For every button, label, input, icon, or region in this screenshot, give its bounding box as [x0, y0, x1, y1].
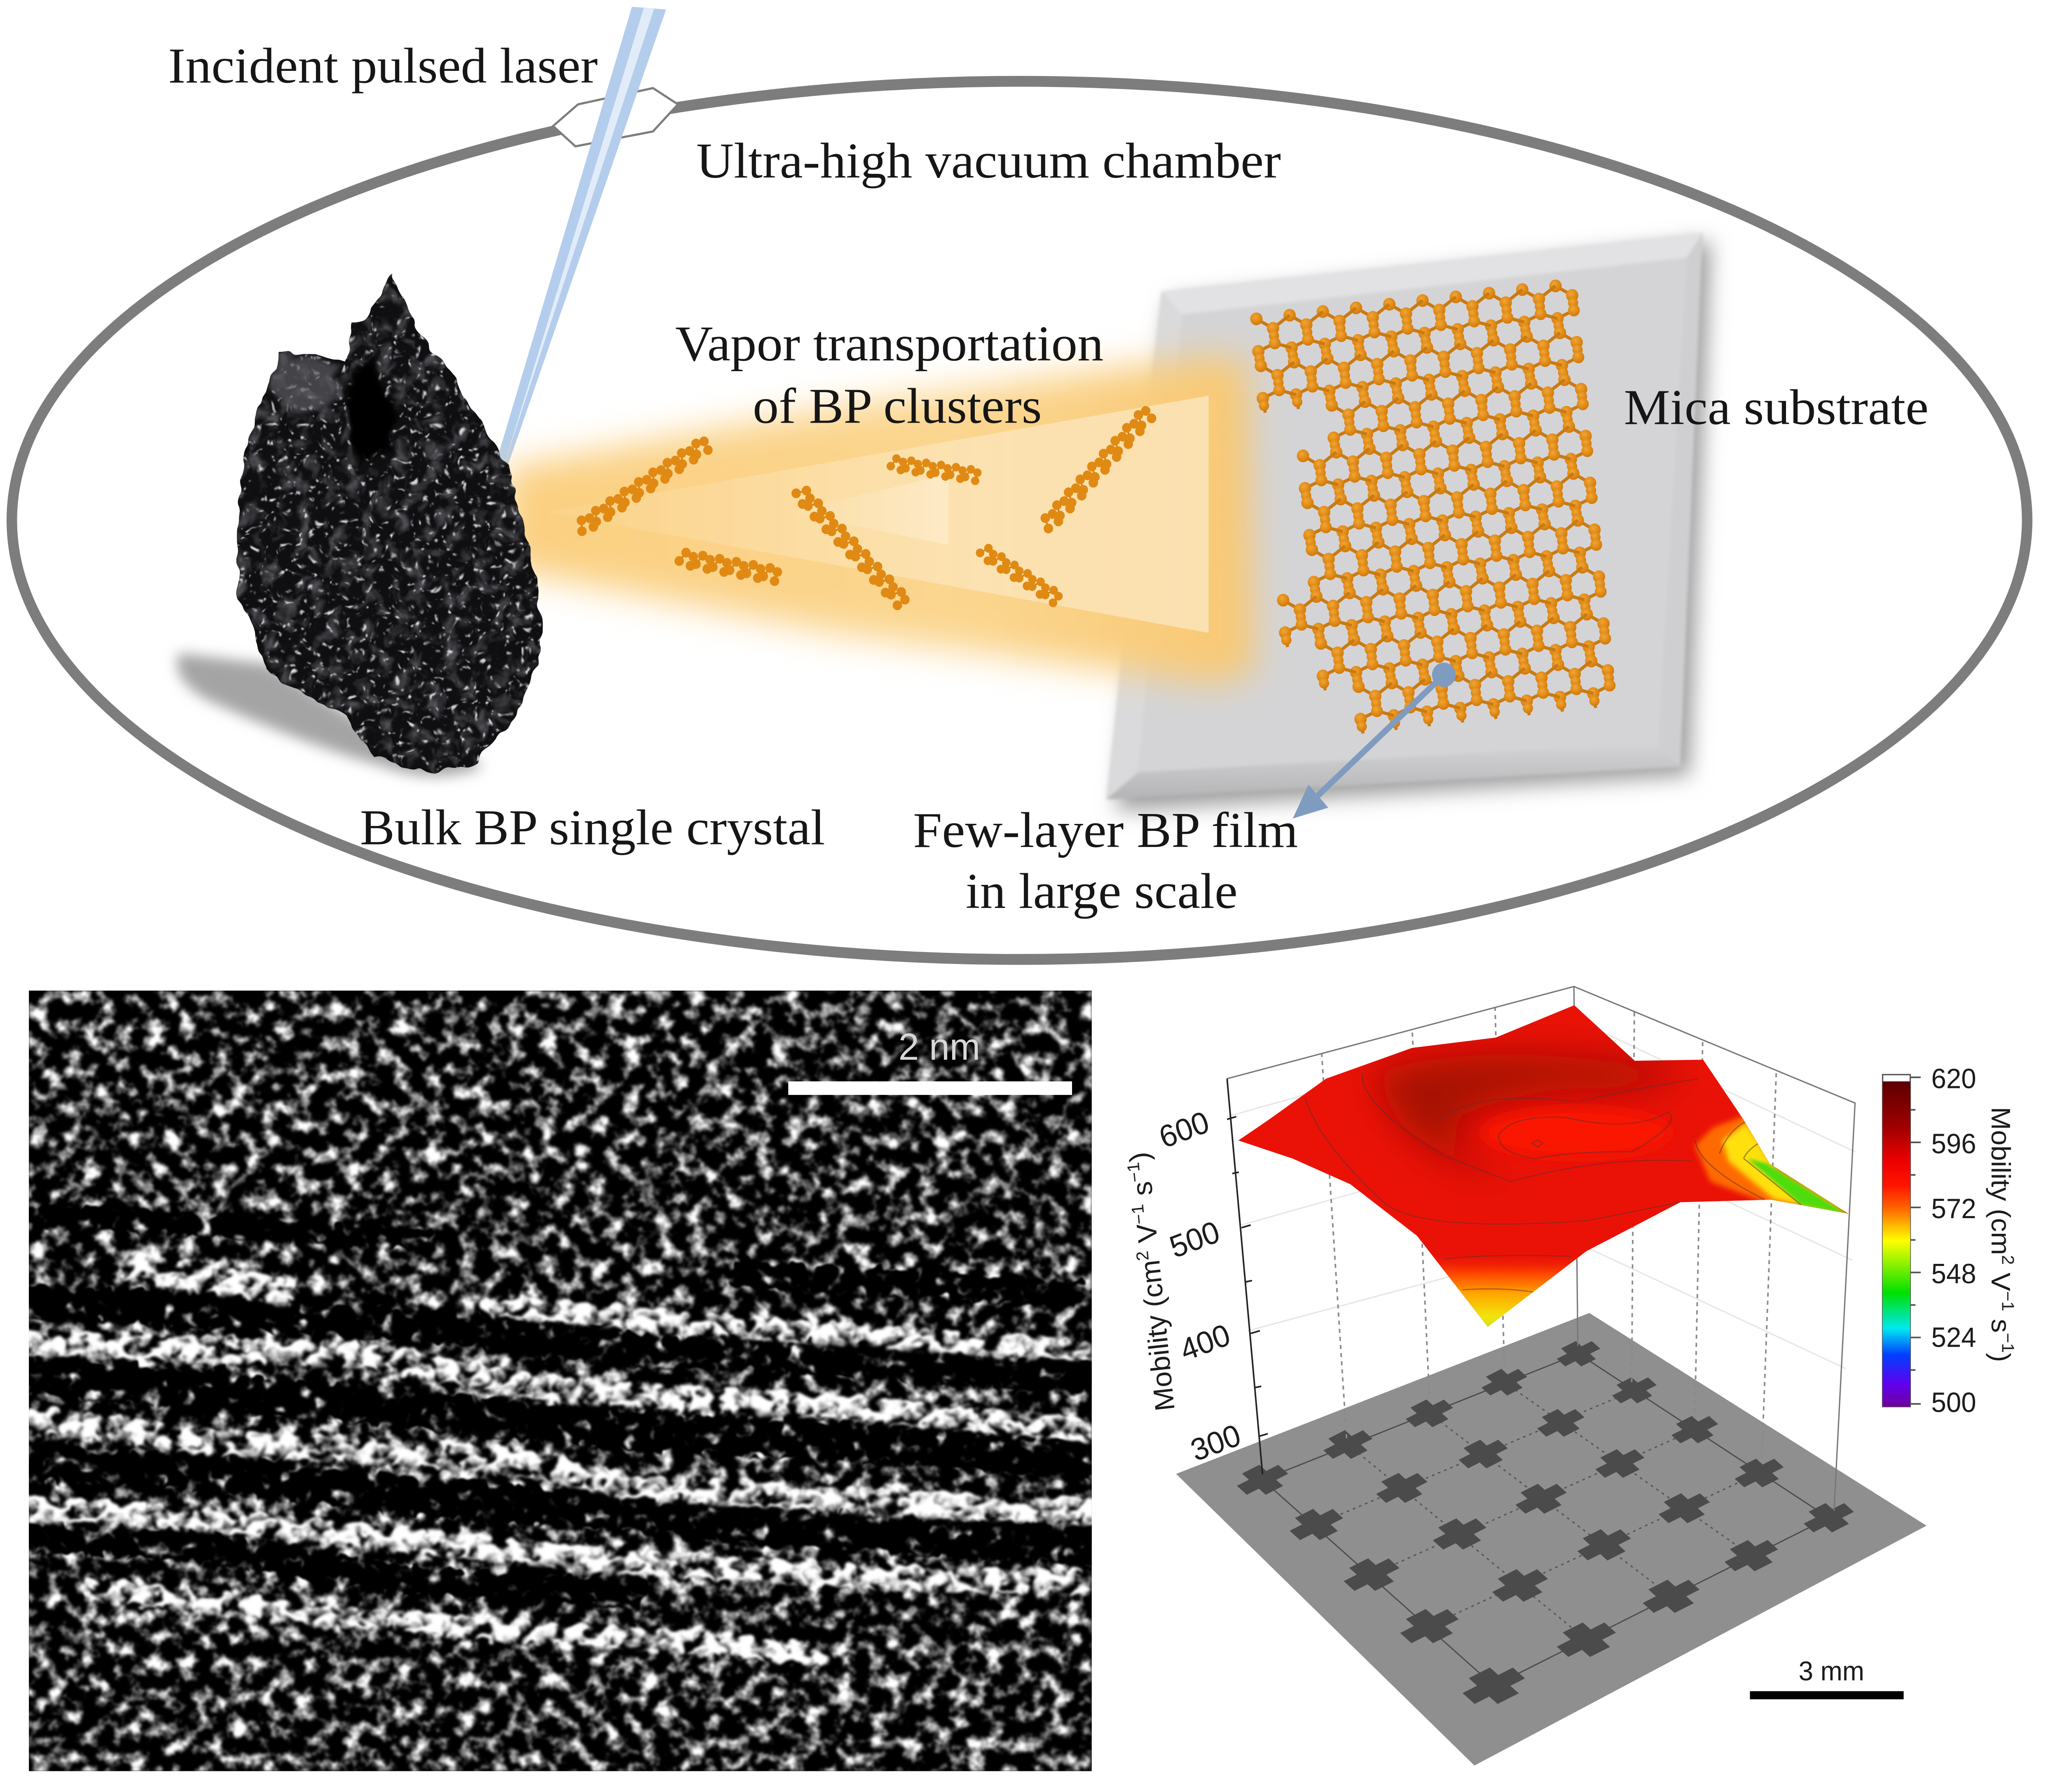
- BP vapor clusters: [577, 409, 1152, 606]
- device crosses: [1230, 1336, 1861, 1711]
- y axis title: V: [1131, 1222, 1164, 1252]
- label: large scale: in large scale: [966, 863, 1238, 919]
- few-layer BP lattice: [1250, 280, 1615, 734]
- TEM scale bar: [788, 1081, 1072, 1095]
- mobility surface: [1229, 996, 1859, 1335]
- colour bar title: V: [1985, 1265, 2016, 1291]
- y axis tick labels: 400: [1176, 1317, 1235, 1368]
- mica substrate: [1106, 233, 1711, 810]
- colour bar title: ): [1985, 1353, 2016, 1362]
- TEM scale label: 2 nm: [899, 1026, 980, 1068]
- y axis title: −1: [1128, 1203, 1149, 1226]
- device substrate floor: [1172, 1310, 1931, 1769]
- vapor plume glow: [506, 355, 1255, 684]
- colour bar title: −1: [1999, 1333, 2018, 1353]
- label: incident laser: Incident pulsed laser: [168, 38, 598, 94]
- colour bar labels: 500: [1931, 1387, 1976, 1418]
- colour bar labels: 596: [1931, 1128, 1976, 1160]
- chamber window: [553, 88, 678, 146]
- y axis title: −1: [1124, 1161, 1145, 1184]
- panel: pulsed laser deposition schematic: [12, 7, 2027, 959]
- y axis title: ): [1124, 1151, 1155, 1163]
- y axis title: 2: [1133, 1250, 1152, 1262]
- colour bar labels: [1931, 1064, 1976, 1418]
- plot scale label: 3 mm: [1798, 1656, 1864, 1686]
- label: vacuum chamber: Ultra-high vacuum chamber: [696, 133, 1281, 188]
- bright lattice fringes: [20, 1267, 1097, 1656]
- colour bar: [1883, 1075, 1921, 1406]
- colour bar title: −1: [1999, 1291, 2018, 1311]
- label: mica substrate: Mica substrate: [1624, 379, 1929, 435]
- label: BP clusters: of BP clusters: [753, 378, 1042, 434]
- colour bar labels: 548: [1931, 1259, 1976, 1289]
- label: vapor transportation: Vapor transportation: [675, 316, 1104, 371]
- label: bulk crystal: Bulk BP single crystal: [360, 800, 825, 855]
- y axis title: Mobility (cm: [1135, 1259, 1181, 1413]
- dark lattice fringes: [13, 1216, 1104, 1595]
- bulk BP crystal: [236, 274, 543, 774]
- vacuum chamber ellipse: [12, 81, 2027, 959]
- incident laser beam: [496, 7, 666, 468]
- colour bar title: Mobility (cm: [1985, 1107, 2016, 1255]
- colour bar title: s: [1985, 1311, 2016, 1333]
- y axis tick labels: 500: [1165, 1214, 1224, 1265]
- axis box and grid: [1227, 987, 1855, 1511]
- colour bar labels: 620: [1931, 1064, 1976, 1095]
- plot scale bar: [1750, 1691, 1904, 1699]
- y axis tick labels: [1155, 1104, 1245, 1468]
- colour bar labels: 524: [1931, 1322, 1976, 1353]
- crystal shadow: [177, 653, 483, 776]
- colour bar labels: 572: [1931, 1193, 1976, 1224]
- label: few-layer film: Few-layer BP film: [913, 802, 1298, 858]
- panel: TEM micrograph: [13, 991, 1104, 1771]
- y axis tick labels: 600: [1155, 1104, 1214, 1155]
- y axis title: s: [1126, 1180, 1159, 1205]
- arrow to film label: [1293, 663, 1456, 819]
- colour bar title: 2: [1999, 1255, 2018, 1265]
- y axis tick labels: 300: [1186, 1418, 1245, 1468]
- panel: 3D mobility map: [1122, 987, 2018, 1769]
